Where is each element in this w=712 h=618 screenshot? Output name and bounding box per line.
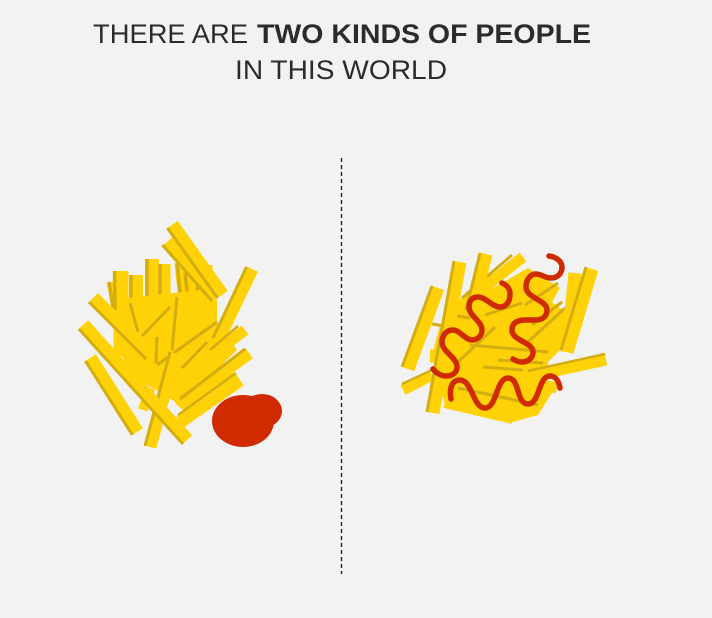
center mass xyxy=(115,290,237,405)
pile of fries xyxy=(402,253,606,422)
title: IN THIS WORLD xyxy=(235,55,447,85)
divider: dashed vertical line xyxy=(340,158,342,574)
pile of fries xyxy=(79,225,252,447)
long fries xyxy=(167,242,217,298)
title: TWO KINDS OF PEOPLE xyxy=(257,19,591,49)
illustration: fries with ketchup squiggled on top xyxy=(402,253,606,422)
ketchup blob xyxy=(212,394,282,447)
title: THERE ARE xyxy=(93,19,248,49)
illustration: fries with ketchup on the side xyxy=(79,225,282,447)
ketchup squiggles xyxy=(433,256,562,408)
title xyxy=(93,19,591,85)
